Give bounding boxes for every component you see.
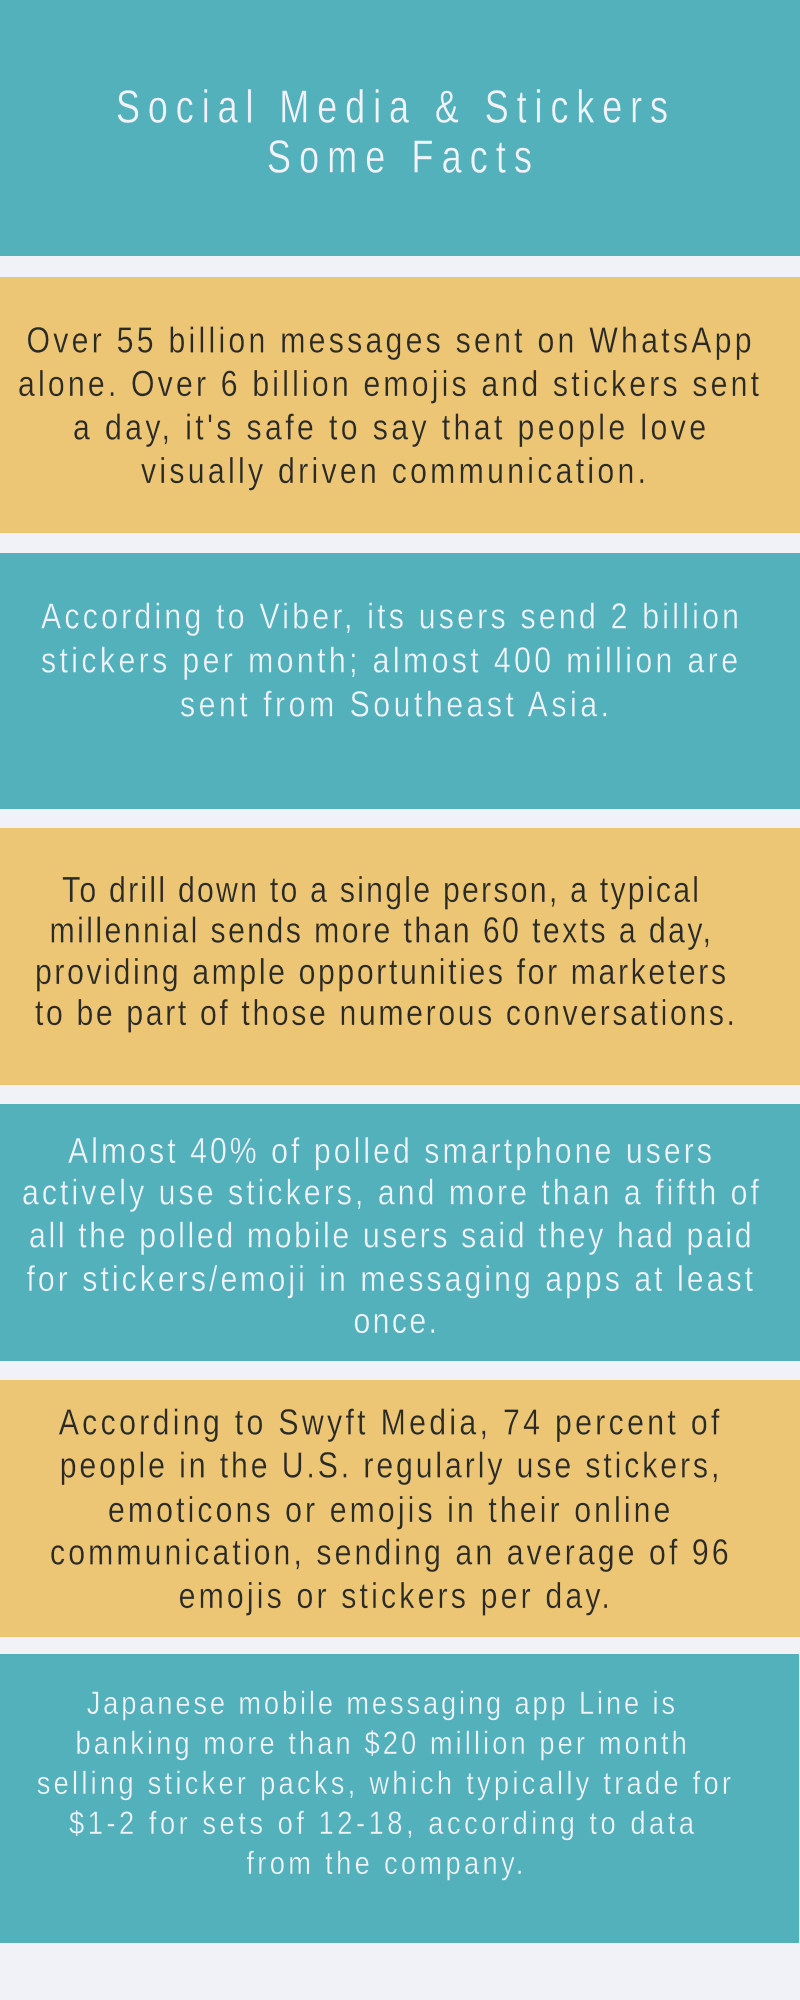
text block: Line fact: $1-2 for sets of 12-18, according to data	[69, 1806, 694, 1842]
panel: Viber fact	[0, 553, 800, 809]
panel: smartphone users fact	[0, 1104, 800, 1361]
text block: millennial fact	[35, 870, 735, 1033]
title: Social Media & Stickers	[116, 81, 668, 133]
text block: Viber fact: According to Viber, its users send 2 billion	[41, 597, 739, 637]
title	[116, 81, 668, 183]
text block: smartphone users fact: for stickers/emoji in messaging apps at least	[26, 1259, 753, 1299]
text block: WhatsApp fact: Over 55 billion messages sent on WhatsApp	[26, 321, 752, 361]
text block: smartphone users fact: once.	[354, 1302, 437, 1342]
text block: Swyft Media fact	[50, 1403, 729, 1617]
text block: Viber fact: stickers per month; almost 400 million are	[41, 641, 738, 681]
text block: Swyft Media fact: emoticons or emojis in their online	[108, 1490, 670, 1530]
text block: Line fact	[37, 1686, 731, 1882]
text block: Line fact: banking more than $20 million per month	[76, 1726, 687, 1762]
title: Some Facts	[267, 131, 532, 183]
text block: Swyft Media fact: According to Swyft Media, 74 percent of	[59, 1403, 720, 1443]
text block: WhatsApp fact: visually driven communication.	[141, 451, 646, 491]
text block: millennial fact: To drill down to a single person, a typical	[62, 870, 699, 910]
text block: Viber fact: sent from Southeast Asia.	[180, 685, 609, 725]
panel: WhatsApp fact	[0, 277, 800, 533]
text block: smartphone users fact: all the polled mobile users said they had paid	[29, 1216, 752, 1256]
text block: WhatsApp fact: a day, it's safe to say that people love	[73, 408, 706, 448]
panel: Line fact	[0, 1654, 799, 1943]
text block: Viber fact	[41, 597, 739, 725]
text block: millennial fact: to be part of those numerous conversations.	[35, 993, 735, 1033]
text block: smartphone users fact	[22, 1132, 760, 1342]
text block: millennial fact: millennial sends more than 60 texts a day,	[50, 911, 711, 951]
text block: smartphone users fact: Almost 40% of polled smartphone users	[68, 1132, 712, 1172]
panel: Swyft Media fact	[0, 1380, 800, 1637]
text block: WhatsApp fact: alone. Over 6 billion emojis and stickers sent	[18, 365, 759, 405]
text block: smartphone users fact: actively use stickers, and more than a fifth of	[22, 1173, 760, 1213]
text block: millennial fact: providing ample opportunities for marketers	[35, 953, 726, 993]
text block: WhatsApp fact	[18, 321, 759, 491]
panel: millennial fact	[0, 828, 800, 1085]
panel: title	[0, 0, 800, 256]
text block: Line fact: Japanese mobile messaging app Line is	[87, 1686, 675, 1722]
text block: Swyft Media fact: people in the U.S. regularly use stickers,	[60, 1446, 719, 1486]
text block: Swyft Media fact: communication, sending an average of 96	[50, 1533, 729, 1573]
text block: Line fact: selling sticker packs, which typically trade for	[37, 1766, 731, 1802]
text block: Line fact: from the company.	[246, 1846, 524, 1882]
text block: Swyft Media fact: emojis or stickers per day.	[179, 1577, 610, 1617]
